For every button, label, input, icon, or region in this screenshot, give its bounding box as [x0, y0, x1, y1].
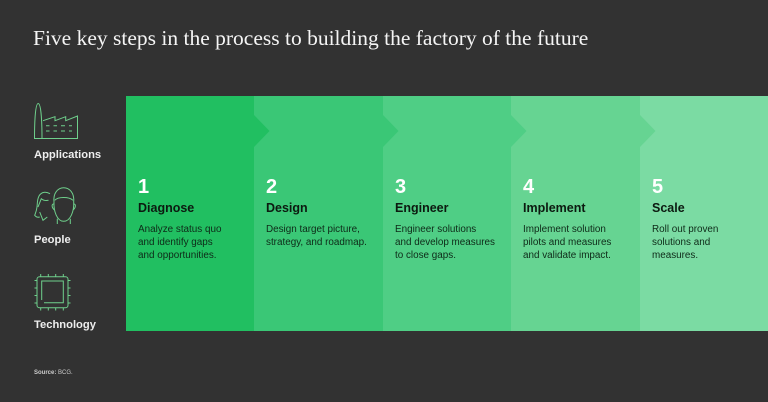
panel: step 1 diagnose — [126, 96, 254, 331]
number 5: 5 — [652, 176, 663, 198]
description: engineer: and develop measures — [395, 237, 495, 248]
panel: step 5 scale — [640, 96, 768, 331]
description: engineer: Engineer solutions — [395, 224, 476, 235]
icon: people — [34, 187, 76, 224]
description: scale: Roll out proven — [652, 224, 718, 235]
description: design: Design target picture, — [266, 224, 360, 235]
arrow: step 3 to 4 — [511, 115, 526, 147]
description: implement — [523, 224, 611, 261]
label: applications: Applications — [34, 149, 101, 161]
description: diagnose: and identify gaps — [138, 237, 213, 248]
description: design: strategy, and roadmap. — [266, 237, 367, 248]
description: scale — [652, 224, 718, 261]
description: scale: solutions and — [652, 237, 710, 248]
icon: technology chip — [34, 274, 70, 310]
icon: factory — [34, 103, 78, 139]
number 4: 4 — [523, 176, 534, 198]
heading: implement: Implement — [523, 201, 586, 215]
arrow: step 4 to 5 — [640, 115, 656, 147]
number 1: 1 — [138, 176, 149, 198]
description: design — [266, 224, 367, 248]
label: people: People — [34, 234, 71, 246]
heading: diagnose: Diagnose — [138, 201, 194, 215]
heading: scale: Scale — [652, 201, 685, 215]
description: diagnose: and opportunities. — [138, 250, 217, 261]
panel: step 2 design — [254, 96, 383, 331]
number 2: 2 — [266, 176, 277, 198]
number 3: 3 — [395, 176, 406, 198]
panel: step 4 implement — [511, 96, 640, 331]
description: engineer — [395, 224, 495, 261]
description: implement: and validate impact. — [523, 250, 611, 261]
label: technology: Technology — [34, 319, 96, 331]
source note: Source: BCG. — [34, 370, 73, 376]
arrow: step 1 to 2 — [254, 115, 270, 147]
description: scale: measures. — [652, 250, 698, 261]
description: engineer: to close gaps. — [395, 250, 456, 261]
panel: step 3 engineer — [383, 96, 511, 331]
heading: design: Design — [266, 201, 308, 215]
description: implement: Implement solution — [523, 224, 606, 235]
description: diagnose: Analyze status quo — [138, 224, 221, 235]
arrow: step 2 to 3 — [383, 115, 398, 147]
description: diagnose — [138, 224, 222, 261]
title: Five key steps in the process to building the factory of the future — [33, 26, 588, 50]
description: implement: pilots and measures — [523, 237, 611, 248]
heading: engineer: Engineer — [395, 201, 448, 215]
